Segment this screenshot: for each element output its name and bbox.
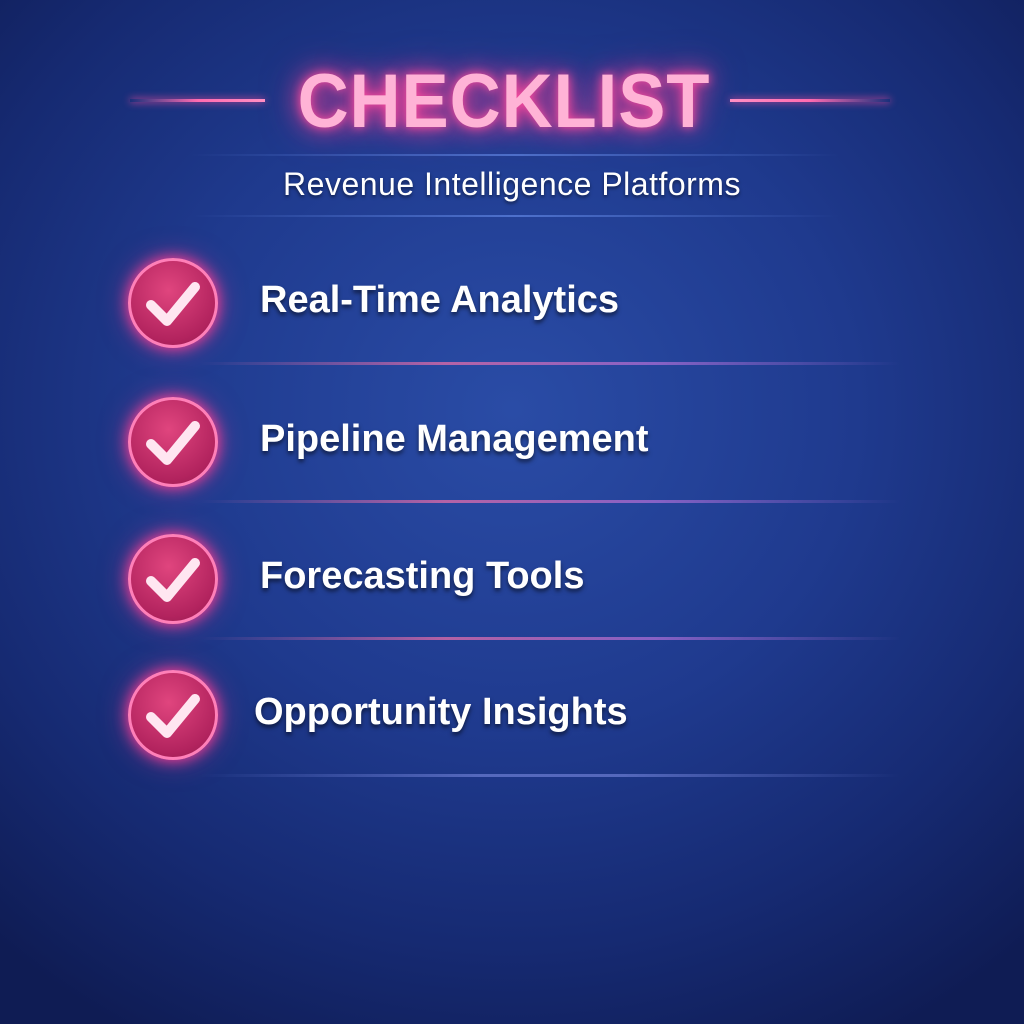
item: Opportunity Insights: [110, 653, 628, 778]
subtitle: Revenue Intelligence Platforms: [283, 166, 741, 202]
label: Pipeline Management: [260, 418, 649, 460]
icon: check circle: [128, 534, 218, 624]
label: Real-Time Analytics: [260, 279, 619, 321]
icon: check circle: [128, 397, 218, 487]
label: Opportunity Insights: [254, 691, 628, 733]
icon: check circle: [128, 670, 218, 760]
item: Pipeline Management: [111, 380, 650, 504]
icon: check circle: [128, 258, 218, 348]
item: Forecasting Tools: [111, 517, 586, 641]
label: Forecasting Tools: [260, 555, 584, 597]
title right line: [730, 99, 890, 102]
title left line: [130, 99, 265, 102]
item: Real-Time Analytics: [111, 241, 620, 365]
title: CHECKLIST: [298, 59, 710, 144]
